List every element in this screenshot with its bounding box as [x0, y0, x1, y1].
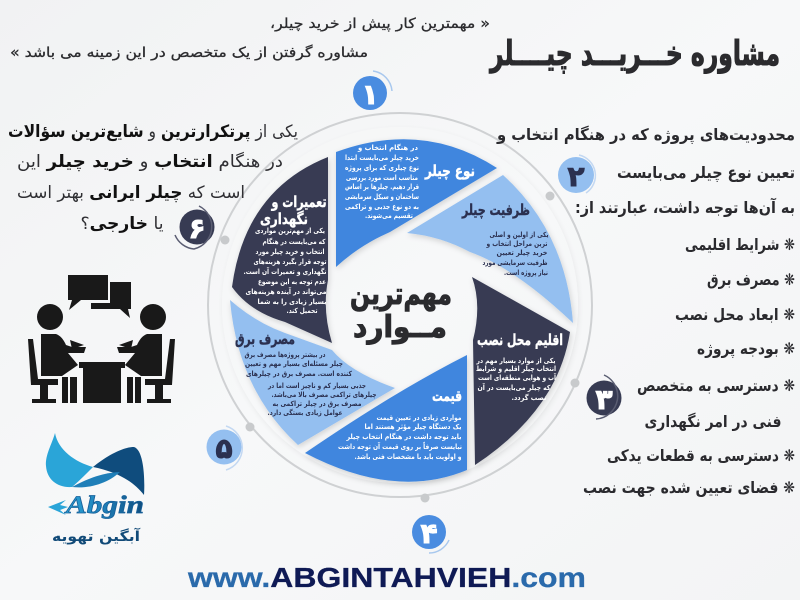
segment 1: chiller type: مناسب است مورد بررسی [346, 174, 418, 182]
segment 6: maintenance: نگهداری و تعمیرات آن است. [244, 267, 327, 276]
logo: Abgin: آبگین تهویه [52, 527, 141, 545]
segment 6: maintenance: نگهداری [260, 210, 308, 228]
segment 5: power consumption: چیلر مسئله‌ای بسیار مهم و تعیین [245, 360, 343, 368]
subtitle: « مهمترین کار پیش از خرید چیلر، [270, 16, 490, 32]
segment 4: price: و اولویت باید با مشخصات فنی باشد. [354, 453, 462, 461]
segment 3: installation climate: که چیلر می‌بایست در آن [478, 383, 551, 392]
segment 5: power consumption: عوامل زیادی بستگی دارد. [268, 408, 343, 417]
badge 2: ۲ [567, 160, 585, 193]
segment 3: installation climate: یکی از موارد بسیار مهم در [476, 357, 556, 365]
badge 3: ۳ [595, 383, 613, 416]
segment 2: chiller capacity [407, 175, 573, 323]
segment 5: power consumption: مصرف برق [235, 330, 295, 348]
segment 1: chiller type [336, 139, 497, 267]
segment 1: chiller type: ساختمان و سیکل سرمایشی [345, 193, 419, 201]
segment 6: maintenance: که می‌بایست در هنگام [262, 237, 326, 246]
logo: Abgin: Abgin [64, 492, 144, 519]
segment 3: installation climate [472, 277, 570, 465]
subtitle [10, 16, 490, 61]
segment 1: chiller type: نوع چیلر [424, 162, 475, 181]
segment 2: chiller capacity: ترین مراحل انتخاب و [486, 240, 548, 248]
subtitle: مشاوره گرفتن از یک متخصص در این زمینه می باشد » [10, 44, 368, 61]
center heading [350, 277, 452, 345]
badge 5: ۵ [215, 432, 233, 465]
right text block: constraints list [496, 125, 795, 497]
center heading: مهم‌ترین [350, 277, 452, 312]
right text block: constraints list: فنی در امر نگهداری [644, 412, 782, 431]
segment 2: chiller capacity: نیاز پروژه است. [504, 269, 548, 277]
badge 6 [175, 206, 214, 249]
segment 2: chiller capacity: خرید چیلر تعیین [496, 249, 548, 257]
segment 4: price: قیمت [432, 387, 462, 405]
segment 6: maintenance: تحمیل کند. [286, 307, 318, 315]
segment 6: maintenance: عدم توجه به این موضوع [258, 278, 326, 286]
segment 2: chiller capacity: یکی از اولین و اصلی [490, 231, 549, 239]
badge 1: ۱ [361, 78, 379, 111]
left text block: question: یکی از پرتکرارترین و شایع‌ترین سؤالات [8, 122, 298, 142]
badge 3 [586, 375, 622, 419]
segment 5: power consumption: مصرف برق در چیلر تراکمی به [272, 400, 362, 408]
segment 4: price: یک دستگاه چیلر مؤثر هستند اما [364, 422, 462, 431]
icon: consultation between two people [28, 275, 175, 403]
center heading: مــوارد [353, 310, 447, 345]
segment 3: installation climate: آب و هوایی منطقه‌ای است [478, 373, 556, 382]
segment 6: maintenance: می‌تواند در آینده هزینه‌های [246, 287, 326, 296]
segment 1: chiller type: قرار دهیم. چیلرها بر اساس [345, 183, 419, 191]
segment 2: chiller capacity: ظرفیت چیلر [461, 201, 530, 220]
segment 6: maintenance [232, 157, 332, 343]
segment 2: chiller capacity: ظرفیت سرمایشی مورد [482, 259, 548, 267]
outer ring [208, 113, 592, 502]
segment 4: price: باید توجه داشت در هنگام انتخاب چیلر [346, 432, 462, 441]
left text block: question [8, 122, 298, 234]
segment 5: power consumption: جذبی بسیار کم و ناچیز است اما در [267, 382, 366, 390]
badge 4: ۴ [420, 517, 438, 550]
left text block: question: است که چیلر ایرانی بهتر است [17, 183, 245, 203]
badge 1 [353, 71, 392, 111]
badge 2 [558, 155, 595, 193]
segment 4: price: نبایست صرفاً بر روی قیمت آن توجه داشت [338, 441, 462, 451]
badge 4 [412, 515, 449, 553]
segment 3: installation climate: اقلیم محل نصب [477, 331, 563, 349]
segment 3: installation climate: نصب گردد. [512, 393, 547, 402]
segment 4: price [305, 355, 467, 482]
segment 1: chiller type: خرید چیلر می‌بایست ابتدا [345, 154, 419, 162]
segment 5: power consumption: چیلرهای تراکمی مصرف بالا می‌باشد. [272, 391, 376, 399]
logo: Abgin [46, 433, 144, 545]
segment 3: installation climate: انتخاب چیلر اقلیم و شرایط [476, 365, 556, 373]
segment 6: maintenance: یکی از مهم‌ترین مواردی [255, 227, 325, 235]
segment 5: power consumption: در بیشتر پروژه‌ها مصرف برق [244, 351, 326, 359]
left text block: question: در هنگام انتخاب و خرید چیلر این [17, 151, 283, 172]
segment 1: chiller type: نوع چیلری که برای پروژه [345, 164, 419, 172]
segment 6: maintenance: بسیار زیادی را به شما [258, 298, 327, 306]
segment 4: price: مواردی زیادی در تعیین قیمت [376, 414, 462, 422]
segment 5: power consumption: کننده است. مصرف برق در چیلرهای [246, 370, 353, 378]
segment 6: maintenance: توجه قرار بگیرد هزینه‌های [254, 257, 327, 266]
badge 5 [206, 426, 242, 470]
segment 1: chiller type: تقسیم می‌شوند. [365, 212, 413, 220]
badge 6: ۶ [188, 212, 206, 245]
segment 6: maintenance: تعمیرات و [271, 193, 326, 211]
left text block: question: یا خارجی؟ [80, 214, 164, 234]
segment 1: chiller type: در هنگام انتخاب و [357, 143, 418, 152]
segment 1: chiller type: به دو نوع جذبی و تراکمی [345, 203, 419, 211]
website url: www. ABGINTAHVIEH .com [187, 562, 586, 593]
segment 6: maintenance: انتخاب و خرید چیلر مورد [256, 248, 324, 256]
segment 5: power consumption [230, 300, 395, 445]
